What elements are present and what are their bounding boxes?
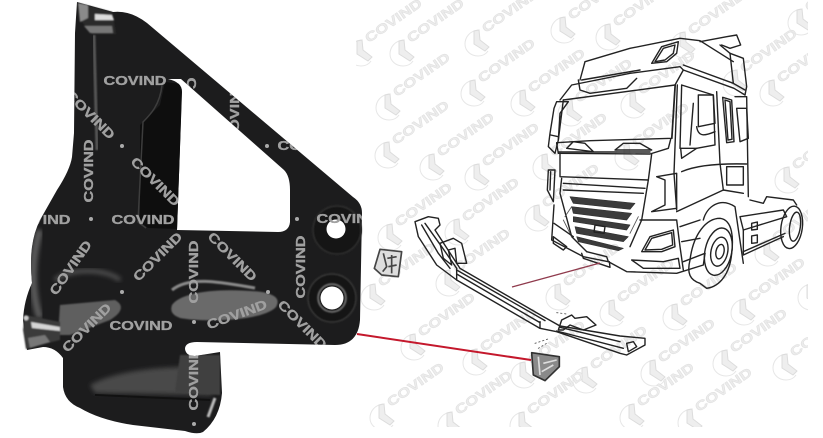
truck line drawing (547, 35, 805, 288)
watermark pattern: COVIND (362, 0, 425, 46)
bracket watermarks: COVIND (8, 212, 70, 227)
bracket watermarks: COVIND (205, 229, 260, 284)
left stud (23, 315, 60, 349)
top stud (78, 3, 116, 34)
watermark pattern: COVIND (477, 304, 540, 355)
watermark pattern: COVIND (459, 174, 522, 225)
watermark pattern: COVIND (475, 35, 538, 86)
bracket watermarks: COVIND (112, 212, 174, 227)
truck chassis (680, 197, 797, 262)
watermark pattern: COVIND (392, 179, 455, 230)
bracket part photo (8, 2, 380, 433)
bracket watermarks: COVIND (81, 140, 96, 202)
watermark pattern: COVIND (745, 254, 808, 305)
watermark pattern: COVIND (774, 35, 823, 86)
bracket watermarks: COVIND (104, 73, 166, 88)
bracket watermarks: COVIND (275, 297, 330, 352)
bracket watermarks: COVIND (227, 80, 242, 144)
watermark pattern: COVIND (629, 99, 692, 150)
watermark pattern: COVIND (479, 119, 542, 170)
truck bumper (552, 205, 705, 273)
lower mounting hole (307, 273, 357, 323)
watermark pattern: COVIND (525, 317, 588, 368)
bracket shading (171, 290, 278, 320)
bracket watermarks: COVIND (128, 154, 183, 209)
watermark pattern: COVIND (547, 109, 610, 160)
bracket watermarks: COVIND (184, 78, 199, 140)
watermark pattern: COVIND (525, 45, 588, 96)
truck rear wheel (778, 205, 805, 250)
watermark pattern: COVIND (384, 359, 447, 410)
watermark pattern: COVIND (524, 367, 587, 418)
truck roof and spoiler (580, 35, 747, 95)
watermark pattern: COVIND (404, 0, 467, 46)
clip part with pointer target (532, 353, 559, 381)
bracket watermarks: COVIND (186, 348, 201, 410)
bracket watermarks: COVIND (59, 300, 114, 355)
watermark pattern: COVIND (452, 367, 515, 418)
watermark pattern: COVIND (769, 195, 823, 246)
bracket watermarks: COVIND (316, 211, 380, 226)
bracket watermarks: COVIND (63, 87, 118, 142)
watermark pattern: COVIND (727, 305, 790, 356)
watermark pattern: COVIND (389, 97, 452, 148)
bracket watermarks: COVIND (46, 238, 95, 298)
upper mounting hole (312, 205, 362, 255)
watermark pattern: COVIND (560, 239, 623, 290)
truck mirror (548, 102, 568, 153)
watermark pattern: COVIND (737, 25, 800, 76)
truck front wheel (689, 203, 743, 288)
watermark pattern: COVIND (450, 225, 513, 276)
bracket watermarks: COVIND (293, 236, 308, 298)
red leader line: bracket to clip (357, 334, 531, 360)
bracket watermarks: COVIND (110, 318, 172, 333)
bracket watermark dots (89, 144, 299, 426)
truck bonnet and vents (547, 139, 671, 202)
small clip part (374, 249, 402, 277)
watermark pattern: COVIND (415, 289, 478, 340)
watermark pattern: COVIND (614, 255, 677, 306)
watermark pattern: COVIND (375, 239, 438, 290)
watermark pattern: COVIND (572, 55, 635, 106)
bracket watermarks: COVIND (205, 297, 269, 332)
watermark pattern: COVIND (635, 47, 698, 98)
bumper beam assembly (415, 217, 645, 355)
truck door and windows (652, 85, 748, 212)
truck visor and windscreen (557, 67, 683, 210)
bracket watermarks: COVIND (186, 240, 201, 304)
bolts (535, 313, 567, 348)
watermark pattern: COVIND (677, 259, 740, 310)
bracket inner flange (140, 82, 182, 229)
left bracket on beam (440, 238, 467, 265)
beam body (415, 217, 645, 355)
bracket watermarks (38, 76, 362, 410)
watermark pattern: COVIND (634, 359, 697, 410)
bracket watermarks: COVIND (130, 229, 185, 284)
watermark pattern (348, 0, 823, 438)
watermark pattern: COVIND (587, 322, 650, 373)
watermark pattern: COVIND (692, 364, 755, 415)
truck grille (560, 178, 648, 252)
bracket watermarks: COVIND (278, 138, 340, 153)
watermark pattern: COVIND (655, 315, 718, 366)
watermark pattern: COVIND (539, 160, 602, 211)
watermark pattern: COVIND (390, 49, 453, 100)
watermark pattern: COVIND (434, 109, 497, 160)
thin leader line: truck to bumper (512, 263, 600, 287)
right bracket on beam (558, 315, 596, 330)
